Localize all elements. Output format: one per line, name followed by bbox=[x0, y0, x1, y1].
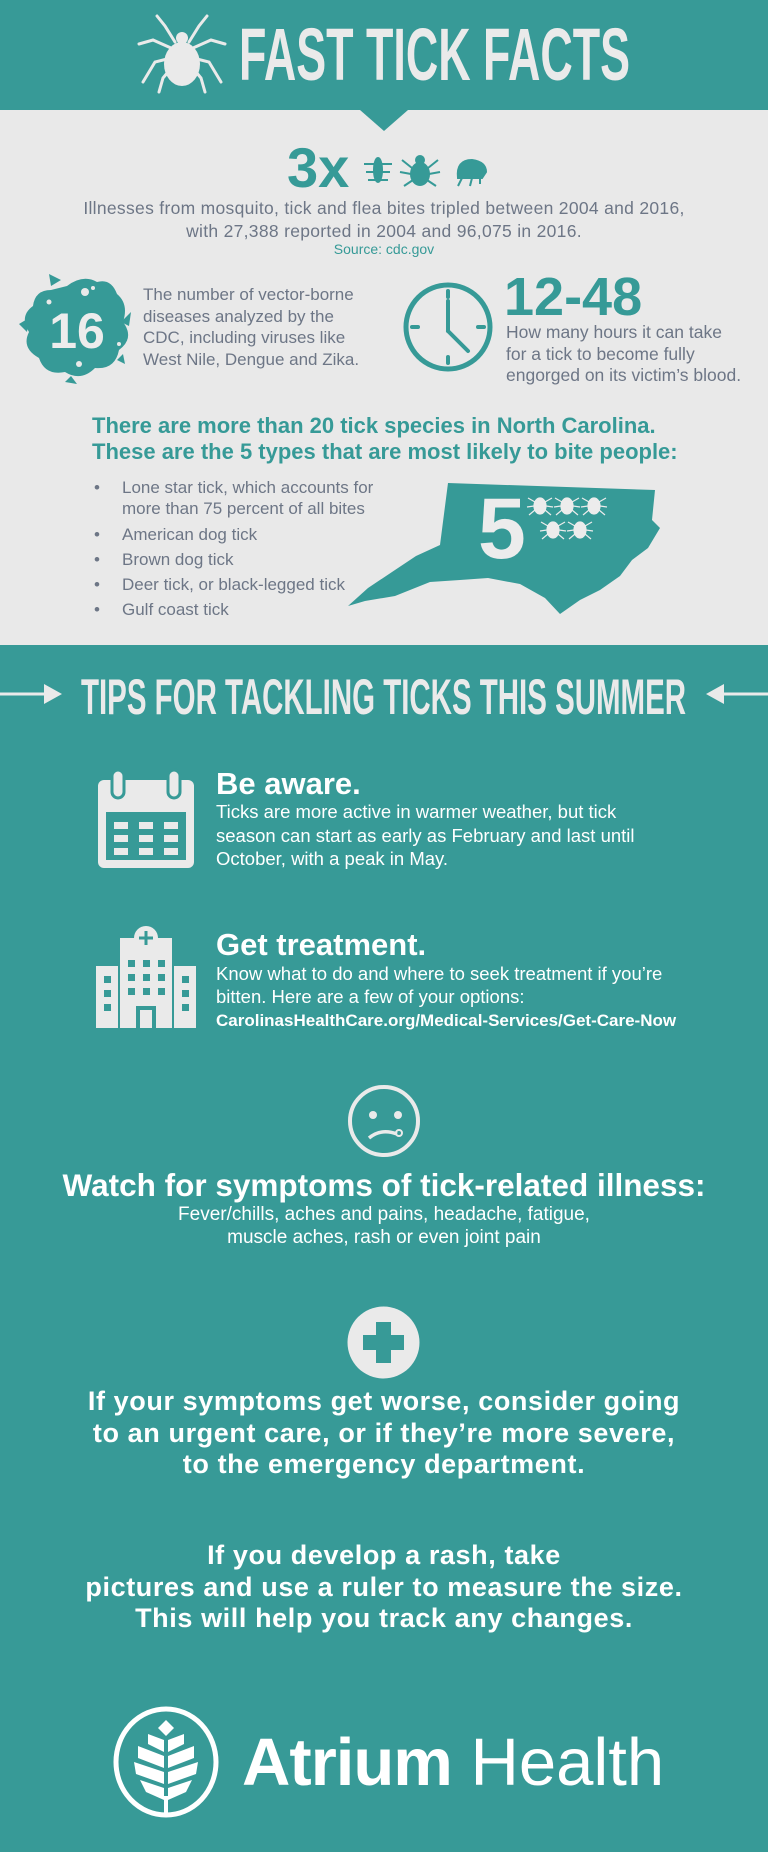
icon: logo leaf bbox=[114, 1706, 218, 1818]
list: tick types: • bbox=[94, 525, 100, 544]
text: rash advice: If you develop a rash, take bbox=[207, 1540, 561, 1570]
list: tick types: • bbox=[94, 550, 100, 569]
text: rash advice: This will help you track any changes. bbox=[135, 1603, 633, 1633]
icon: tick bbox=[138, 14, 226, 94]
text: vector-borne diseases: diseases analyzed by the bbox=[143, 307, 334, 326]
text: hours engorged: How many hours it can take bbox=[506, 322, 722, 342]
text: illnesses tripled bbox=[83, 198, 685, 241]
text: illnesses tripled: with 27,388 reported in 2004 and 96,075 in 2016. bbox=[186, 221, 582, 241]
list: tick types: Gulf coast tick bbox=[122, 600, 229, 619]
text: hours engorged: engorged on its victim’s blood. bbox=[506, 365, 741, 385]
icon: 16 virus bbox=[19, 274, 131, 384]
heading: watch for symptoms: Watch for symptoms of tick-related illness: bbox=[63, 1167, 705, 1203]
text: illnesses tripled: Illnesses from mosquito, tick and flea bites tripled between 2004 and 2016, bbox=[83, 198, 685, 218]
text: logo wordmark: Atrium Health bbox=[242, 1725, 664, 1800]
list: tick types: more than 75 percent of all bites bbox=[122, 499, 365, 518]
stat: 3x bbox=[287, 136, 487, 199]
tip: get treatment: bitten. Here are a few of your options: bbox=[216, 986, 525, 1007]
icon: calendar bbox=[98, 772, 194, 868]
text: rash advice bbox=[85, 1540, 683, 1633]
heading: tick species: There are more than 20 tick species in North Carolina. bbox=[92, 413, 656, 438]
text: vector-borne diseases: CDC, including viruses like bbox=[143, 328, 345, 347]
logo: atrium health bbox=[114, 1706, 664, 1818]
tip: be aware: Be aware. bbox=[216, 766, 361, 801]
icon: clock bbox=[404, 282, 492, 372]
text: hours engorged: for a tick to become fully bbox=[506, 344, 695, 364]
text: vector-borne diseases: The number of vector-borne bbox=[143, 285, 354, 304]
icons: mosquito tick flea bbox=[364, 155, 487, 187]
panel: facts bbox=[0, 110, 768, 645]
map: north carolina with 5 ticks: 5 bbox=[478, 481, 526, 577]
tip: be aware: season can start as early as February and last until bbox=[216, 824, 635, 846]
text: rash advice: pictures and use a ruler to measure the size. bbox=[85, 1572, 683, 1602]
tip: get treatment: Get treatment. bbox=[216, 927, 426, 962]
list: tick types: • bbox=[94, 575, 100, 594]
list: tick types: Brown dog tick bbox=[122, 550, 234, 569]
stat: 3x: 3x bbox=[287, 136, 349, 199]
text: symptoms list bbox=[178, 1204, 590, 1248]
icon: 16 virus: 16 bbox=[49, 303, 105, 359]
icon: plus circle bbox=[348, 1306, 420, 1378]
text: worse symptoms: If your symptoms get worse, consider going bbox=[88, 1386, 680, 1416]
tip: be aware: Ticks are more active in warmer weather, but tick bbox=[216, 801, 616, 822]
icon: hospital bbox=[96, 926, 196, 1028]
list: tick types: • bbox=[94, 478, 100, 497]
text: symptoms list: muscle aches, rash or even joint pain bbox=[227, 1227, 541, 1248]
heading: tick species: These are the 5 types that are most likely to bite people: bbox=[92, 439, 678, 464]
text: worse symptoms: to an urgent care, or if they’re more severe, bbox=[93, 1418, 675, 1448]
text: vector-borne diseases: West Nile, Dengue and Zika. bbox=[143, 350, 359, 369]
list: tick types: American dog tick bbox=[122, 525, 257, 544]
header band bbox=[0, 0, 768, 110]
list: tick types: Lone star tick, which accounts for bbox=[122, 478, 373, 497]
map: north carolina with 5 ticks bbox=[348, 481, 660, 614]
tip: get treatment: Know what to do and where to seek treatment if you’re bbox=[216, 963, 662, 984]
source: Source: cdc.gov bbox=[334, 241, 434, 257]
text: worse symptoms bbox=[88, 1386, 680, 1479]
text: hours engorged bbox=[506, 322, 741, 385]
arrow: right bbox=[706, 684, 768, 704]
heading: tick species bbox=[92, 413, 678, 464]
arrow: left bbox=[0, 684, 62, 704]
icon: sad face bbox=[348, 1085, 420, 1157]
list: tick types bbox=[94, 478, 373, 619]
text: vector-borne diseases bbox=[143, 285, 359, 369]
list: tick types: • bbox=[94, 600, 100, 619]
list: tick types: Deer tick, or black-legged tick bbox=[122, 575, 345, 594]
pointer triangle bbox=[360, 110, 408, 131]
text: symptoms list: Fever/chills, aches and pains, headache, fatigue, bbox=[178, 1204, 590, 1225]
tip: get treatment bbox=[216, 927, 676, 1030]
text: worse symptoms: to the emergency department. bbox=[183, 1449, 585, 1479]
stat: 12-48: 12-48 bbox=[504, 267, 642, 327]
tip: be aware bbox=[216, 766, 635, 869]
tip: be aware: October, with a peak in May. bbox=[216, 848, 448, 869]
tip: get treatment: CarolinasHealthCare.org/Medical-Services/Get-Care-Now bbox=[216, 1011, 676, 1030]
